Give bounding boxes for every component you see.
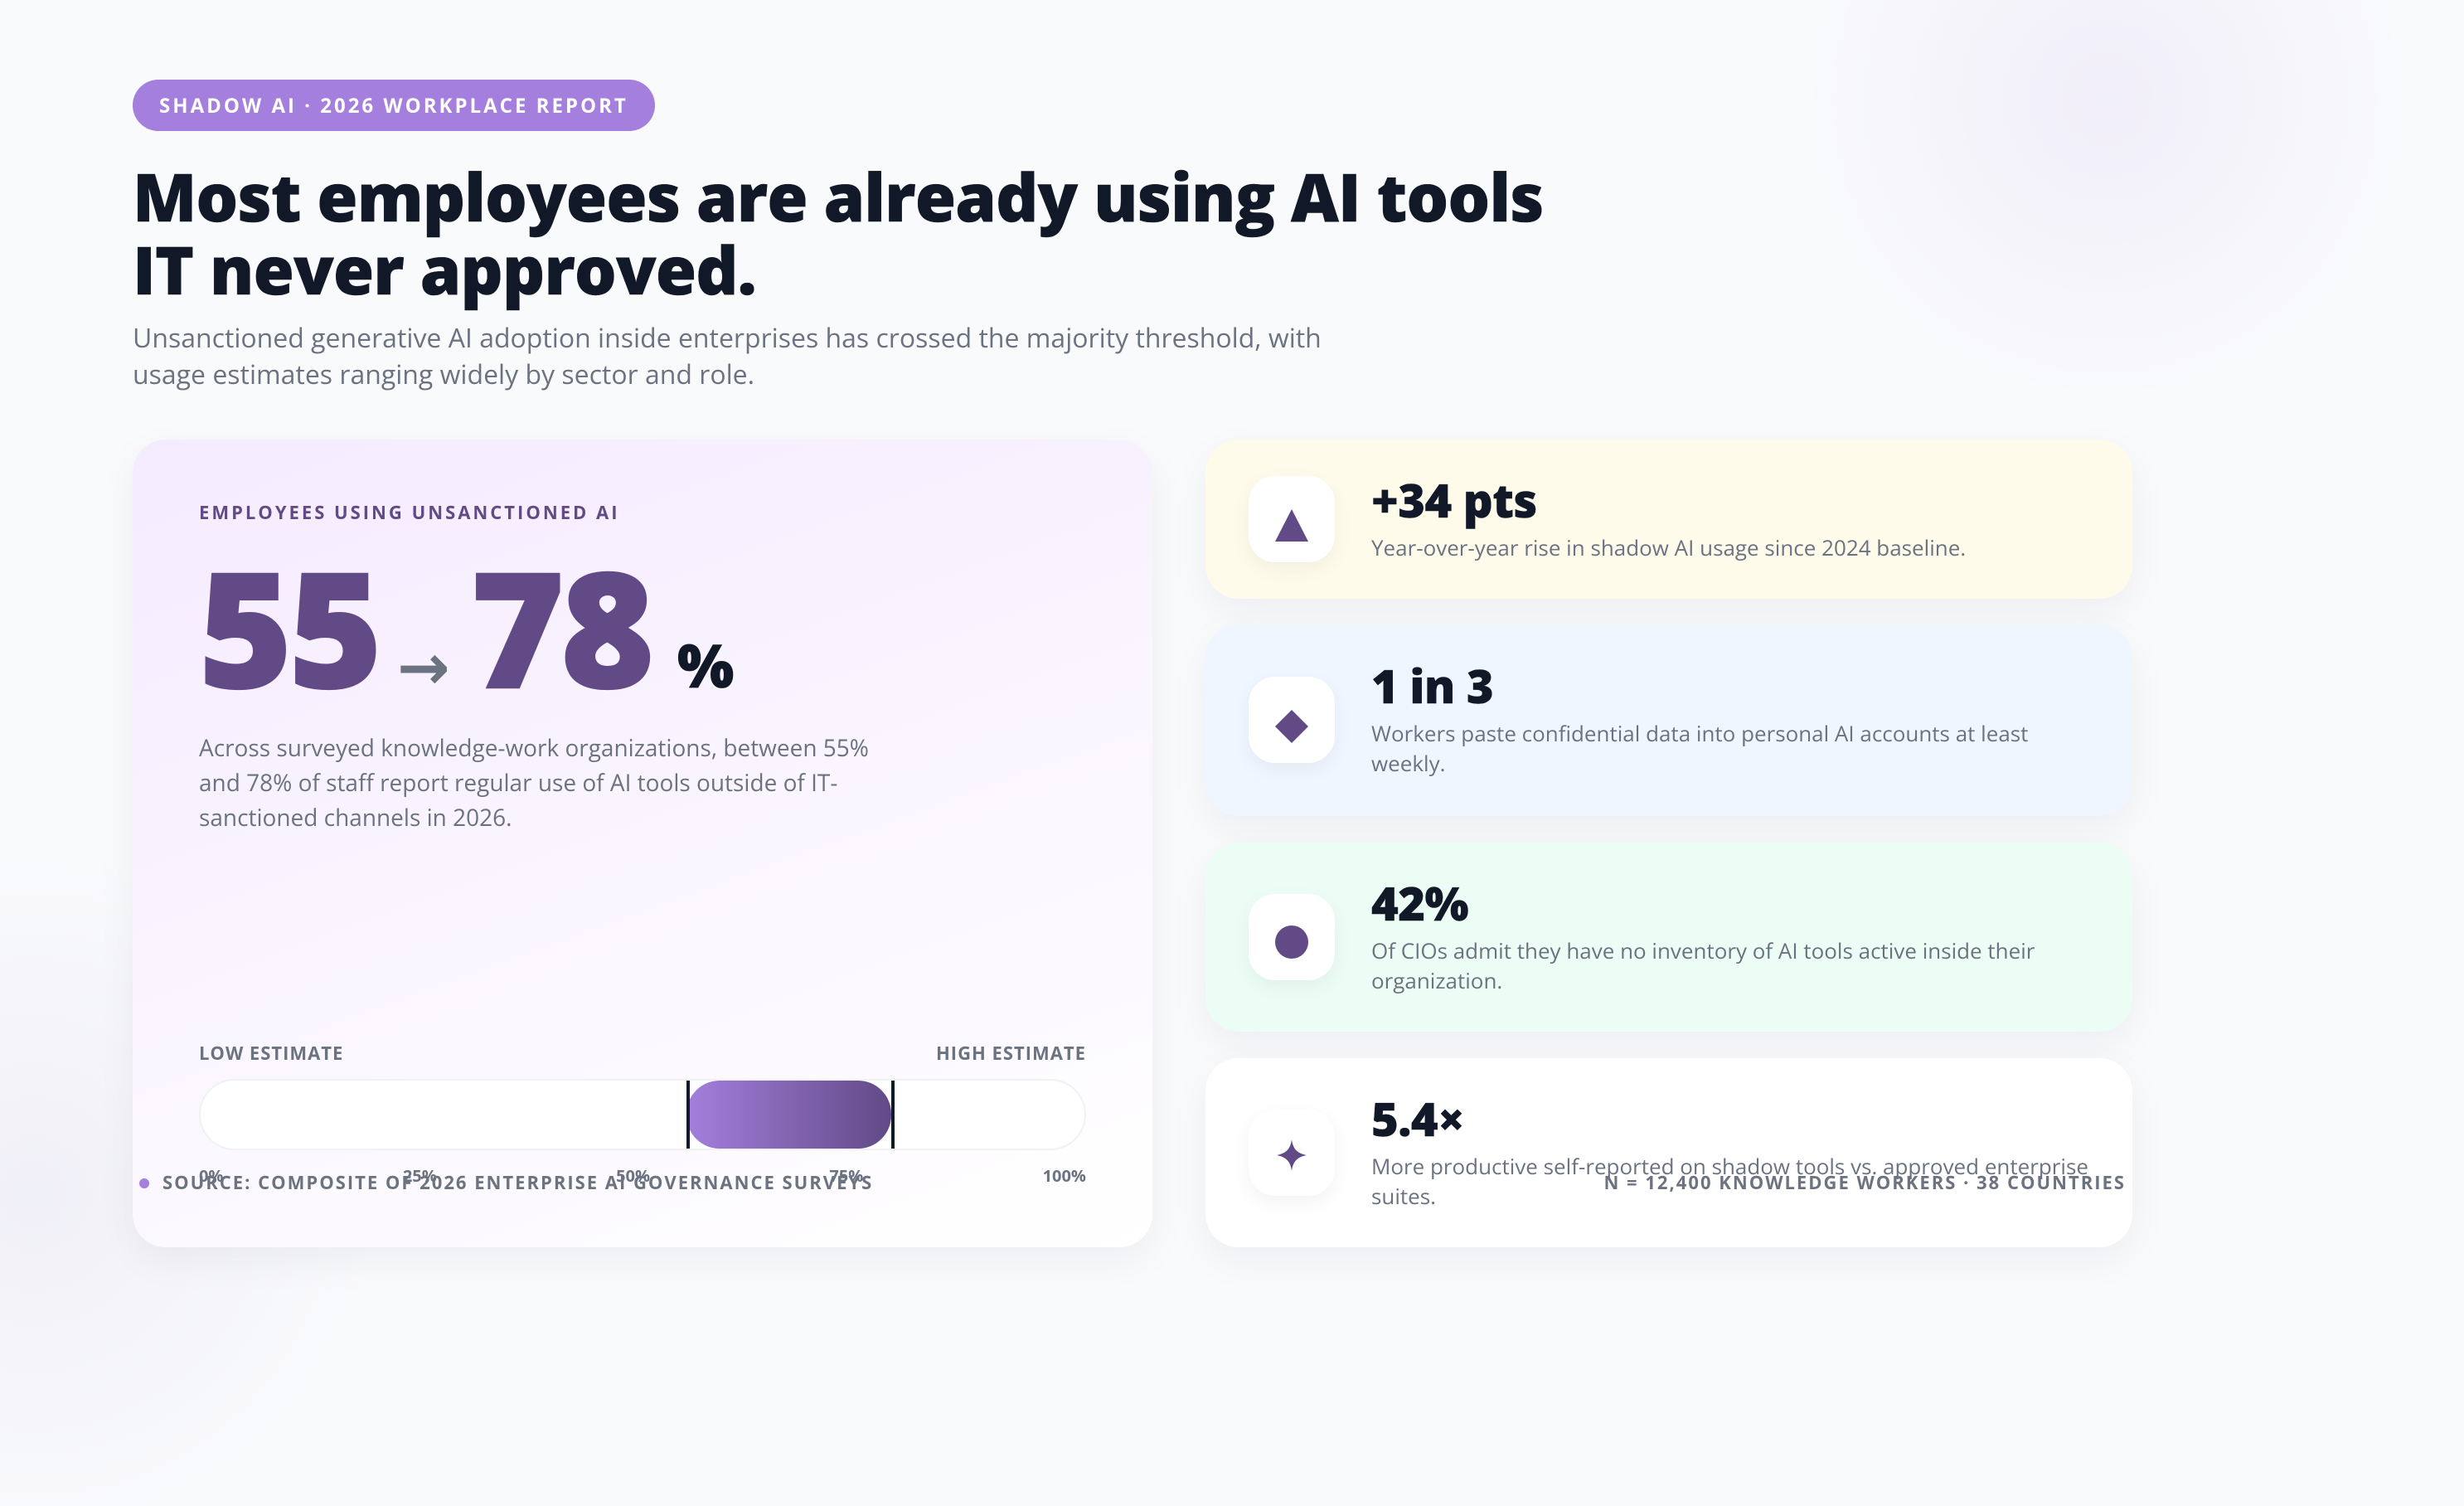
high estimate label: HIGH ESTIMATE [936, 1041, 1086, 1066]
stat description [199, 732, 869, 833]
value: 42% [1371, 872, 1468, 935]
description: Year-over-year rise in shadow AI usage since 2024 baseline. [1371, 532, 1966, 562]
footer source [139, 1170, 873, 1195]
subtitle [133, 320, 1322, 392]
low estimate label: LOW ESTIMATE [199, 1041, 343, 1066]
title [133, 151, 1544, 314]
range fill [686, 1081, 891, 1149]
source dot [139, 1178, 149, 1188]
stat card: CIO inventory [1205, 843, 2132, 1032]
stat description: and 78% of staff report regular use of AI tools outside of IT- [199, 767, 837, 799]
value: 1 in 3 [1371, 654, 1493, 717]
scale labels: 75% [829, 1164, 863, 1187]
description: organization. [1371, 965, 1502, 995]
range bar [199, 1079, 1086, 1150]
subtitle: usage estimates ranging widely by sector and role. [133, 357, 754, 392]
title: Most employees are already using AI tools [133, 151, 1544, 241]
big number: high value: 78 [471, 518, 651, 735]
high marker [891, 1081, 895, 1149]
description: Workers paste confidential data into personal AI accounts at least [1371, 718, 2028, 748]
big number: low value: 55 [199, 518, 379, 735]
icon: sparkle [1249, 1110, 1335, 1196]
title: IT never approved. [133, 224, 756, 314]
header pill [133, 80, 655, 131]
scale labels [199, 1164, 1086, 1187]
subtitle: Unsanctioned generative AI adoption inside enterprises has crossed the majority threshold, with [133, 320, 1322, 356]
scale labels: 100% [1043, 1164, 1086, 1187]
scale labels: 0% [199, 1164, 223, 1187]
description: suites. [1371, 1181, 1436, 1211]
percent sign: % [677, 624, 734, 706]
header pill: SHADOW AI · 2026 WORKPLACE REPORT [159, 92, 628, 119]
scale labels: 50% [616, 1164, 650, 1187]
description [1371, 718, 2028, 778]
icon: circle [1249, 894, 1335, 980]
arrow: → [397, 630, 450, 704]
description: More productive self-reported on shadow tools vs. approved enterprise [1371, 1151, 2088, 1181]
panel: main stat [133, 440, 1152, 1247]
scale labels: 25% [403, 1164, 437, 1187]
stat card: yearly rise [1205, 440, 2132, 599]
icon: triangle [1249, 476, 1335, 562]
value: 5.4× [1371, 1087, 1464, 1150]
stat card: productivity [1205, 1058, 2132, 1247]
stat label: EMPLOYEES USING UNSANCTIONED AI [199, 500, 620, 525]
stat card: confidential data [1205, 624, 2132, 816]
icon: diamond [1249, 677, 1335, 763]
description [1371, 935, 2035, 995]
value: +34 pts [1371, 469, 1537, 532]
footer sample size: N = 12,400 KNOWLEDGE WORKERS · 38 COUNTRIES [1603, 1170, 2126, 1195]
description [1371, 1151, 2088, 1211]
low marker [686, 1081, 690, 1149]
description: Of CIOs admit they have no inventory of AI tools active inside their [1371, 935, 2035, 965]
source text: SOURCE: COMPOSITE OF 2026 ENTERPRISE AI GOVERNANCE SURVEYS [162, 1170, 873, 1195]
stat description: sanctioned channels in 2026. [199, 802, 512, 833]
description: weekly. [1371, 748, 1445, 778]
stat description: Across surveyed knowledge-work organizations, between 55% [199, 732, 869, 764]
